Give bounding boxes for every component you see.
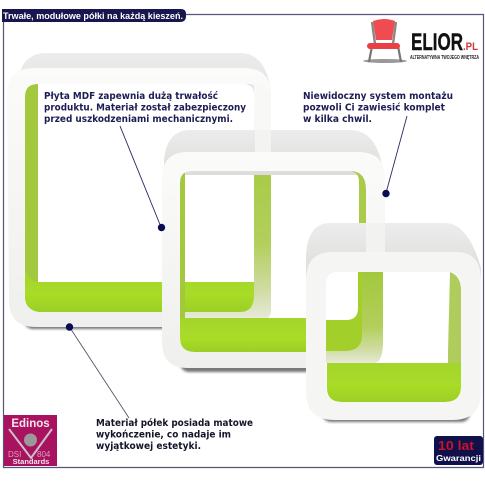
callout: bottom: Materiał półek posiada matowe [96, 418, 253, 429]
heading bar: Trwałe, modułowe półki na każdą kieszeń. [3, 11, 183, 22]
badge: warranty [434, 436, 483, 465]
logo: Elior: ELIOR [411, 29, 463, 56]
icon: red chair [363, 19, 407, 63]
callout: top right: pozwoli Ci zawiesić komplet [303, 102, 446, 114]
small shelf [306, 223, 481, 422]
badge: warranty: 10 lat [438, 438, 475, 453]
logo: Elior: .PL [463, 41, 478, 53]
badge: warranty: Gwarancji [436, 453, 481, 463]
badge: Edinos: DSI [8, 450, 21, 459]
callout: bottom: wyjątkowej estetyki. [96, 441, 201, 452]
callout: top left [44, 91, 246, 125]
callout: top right [303, 91, 453, 125]
logo: Elior [363, 19, 479, 63]
leader line: finish [66, 323, 129, 418]
callout: bottom: wykończenie, co nadaje im [96, 430, 231, 440]
callout: top right: Niewidoczny system montażu [303, 91, 453, 102]
leader line: mounting [382, 116, 407, 197]
callout: top left: przed uszkodzeniami mechanicznymi. [44, 114, 233, 125]
callout: bottom [96, 418, 253, 452]
large shelf [7, 53, 271, 329]
badge: Edinos: Edinos [11, 418, 50, 430]
leader line: MDF [120, 126, 165, 231]
callout: top right: w kilka chwil. [303, 114, 372, 125]
callout: top left: produktu. Materiał został zabezpieczony [44, 102, 246, 114]
badge: Edinos: Standards [13, 457, 49, 466]
medium shelf [162, 130, 385, 372]
callout: top left: Płyta MDF zapewnia dużą trwałość [44, 91, 218, 102]
badge: Edinos [4, 415, 57, 466]
badge: Edinos: 804 [37, 450, 51, 459]
